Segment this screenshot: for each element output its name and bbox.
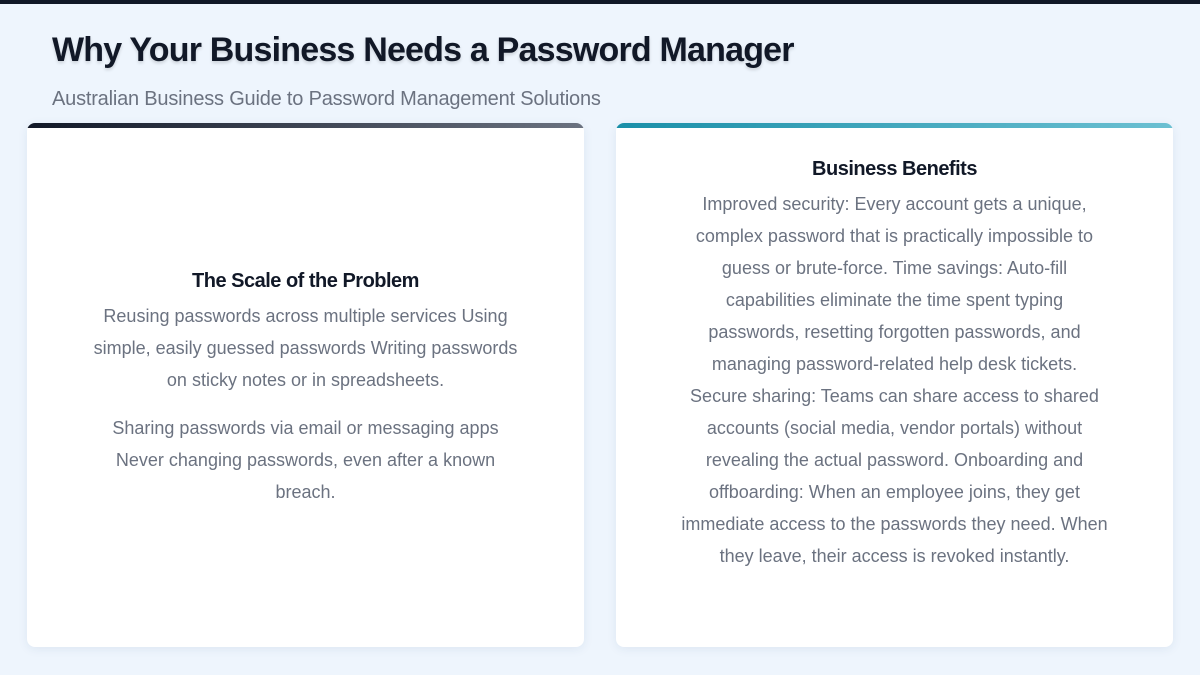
text block: benefits <box>681 194 1108 566</box>
title: Why Your Business Needs a Password Manager <box>52 31 794 69</box>
text block: problem list: Sharing passwords via email or messaging apps <box>112 418 499 438</box>
text block: benefits: immediate access to the passwords they need. When <box>681 514 1108 534</box>
heading: benefits: Business Benefits <box>812 158 977 180</box>
text block: problem list: Reusing passwords across multiple services Using <box>103 306 508 326</box>
text block: benefits: they leave, their access is revoked instantly. <box>720 546 1069 566</box>
text block: benefits: offboarding: When an employee joins, they get <box>709 482 1080 502</box>
text block: benefits: accounts (social media, vendor portals) without <box>707 418 1082 438</box>
panel: business benefits <box>616 123 1173 647</box>
text block: benefits: guess or brute-force. Time savings: Auto-fill <box>722 258 1067 278</box>
subtitle: Australian Business Guide to Password Management Solutions <box>52 88 601 110</box>
text block: problem list <box>94 306 517 502</box>
text block: problem list: on sticky notes or in spreadsheets. <box>167 370 444 390</box>
text block: benefits: Secure sharing: Teams can share access to shared <box>690 386 1099 406</box>
text block: problem list: simple, easily guessed passwords Writing passwords <box>94 338 517 358</box>
heading: problem: The Scale of the Problem <box>192 270 419 292</box>
text block: benefits: managing password-related help desk tickets. <box>712 354 1077 374</box>
text block: benefits: revealing the actual password. Onboarding and <box>706 450 1083 470</box>
panel: scale of the problem <box>27 123 584 647</box>
text block: benefits: complex password that is practically impossible to <box>696 226 1093 246</box>
text block: benefits: capabilities eliminate the time spent typing <box>726 290 1063 310</box>
text block: benefits: Improved security: Every account gets a unique, <box>702 194 1087 214</box>
text block: problem list: breach. <box>275 482 336 502</box>
text block: benefits: passwords, resetting forgotten passwords, and <box>708 322 1081 342</box>
text block: problem list: Never changing passwords, even after a known <box>116 450 495 470</box>
